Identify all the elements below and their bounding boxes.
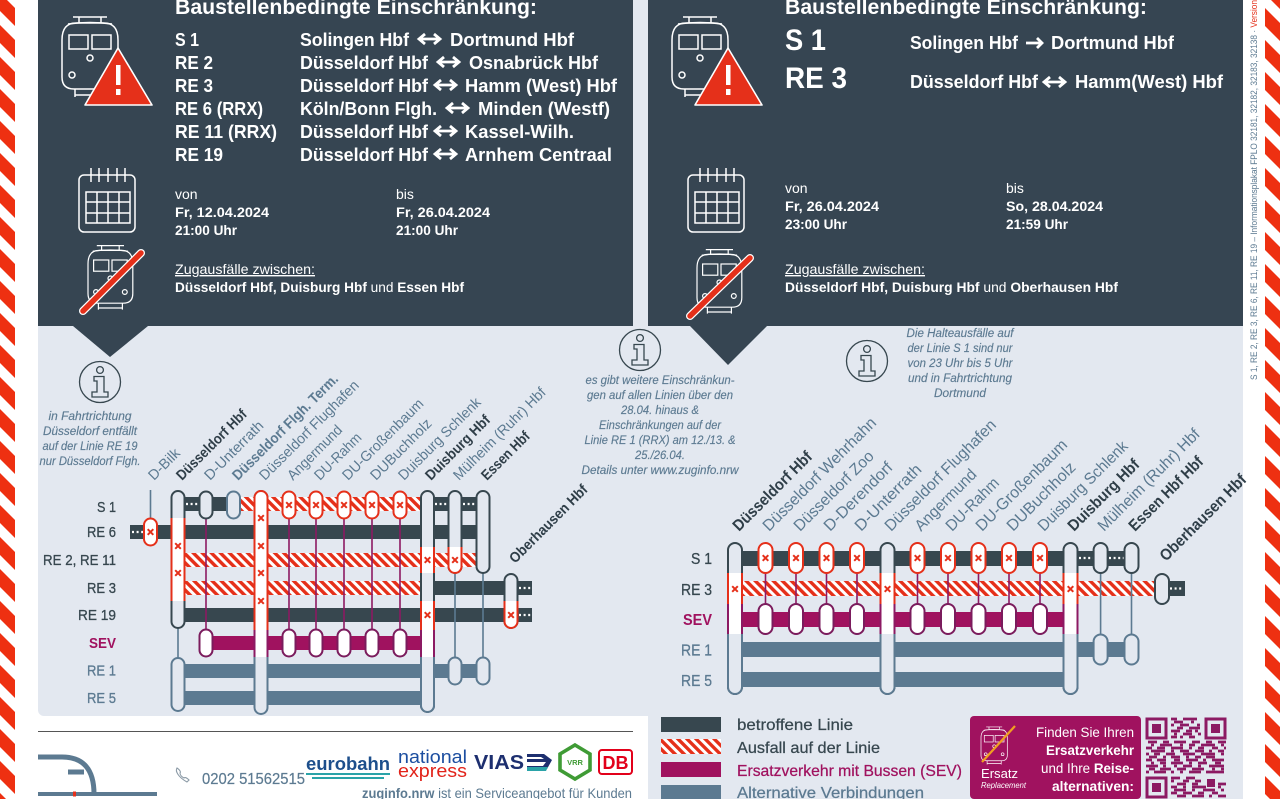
route list: RE 6 (RRX) xyxy=(175,98,263,119)
route list: Düsseldorf Hbf xyxy=(300,121,429,142)
stops xyxy=(144,491,518,714)
row labels: SEV xyxy=(683,612,712,629)
Ersatz label: Replacement xyxy=(981,780,1027,790)
route list: Arnhem Centraal xyxy=(465,144,612,165)
route list: Solingen Hbf xyxy=(300,29,410,50)
note: left xyxy=(40,411,140,468)
note: left: auf der Linie RE 19 xyxy=(42,441,138,453)
icon: info middle xyxy=(620,330,660,370)
station labels: Mülheim (Ruhr) Hbf xyxy=(1095,426,1204,535)
line bars xyxy=(130,497,532,705)
note: middle: 28.04. hinaus & xyxy=(620,405,699,417)
date range: bis xyxy=(1006,180,1024,196)
row labels: RE 2, RE 11 xyxy=(43,552,116,569)
station labels: Düsseldorf Hbf xyxy=(174,407,251,484)
station labels: D-Derendorf xyxy=(821,459,897,535)
route list: Düsseldorf Hbf xyxy=(300,144,429,165)
logo: VRR xyxy=(560,745,590,779)
row labels: S 1 xyxy=(691,551,712,568)
connector lines xyxy=(150,490,483,660)
call to action: und Ihre Reise- xyxy=(1041,760,1134,776)
note: left: in Fahrtrichtung xyxy=(48,411,132,423)
row labels xyxy=(681,551,712,690)
phone number: 0202 51562515 xyxy=(202,771,305,788)
station labels: D-Bilk xyxy=(146,445,184,484)
station labels: Duisburg Schlenk xyxy=(1035,437,1132,535)
routes: Düsseldorf Hbf xyxy=(910,71,1039,92)
station labels: Duisburg Hbf xyxy=(1065,456,1144,535)
logo: DB xyxy=(599,750,632,774)
station labels: Düsseldorf Flughafen xyxy=(257,378,363,484)
route list: Hamm (West) Hbf xyxy=(465,75,618,96)
row labels: RE 1 xyxy=(681,642,712,660)
icon: train warning xyxy=(62,17,152,105)
icon: calendar xyxy=(79,168,135,232)
date range xyxy=(785,180,1103,232)
note: middle: 25./26.04. xyxy=(634,450,685,462)
icon: calendar xyxy=(688,168,744,232)
connector lines xyxy=(766,573,1132,635)
logo: VIAS: VIAS xyxy=(474,752,524,774)
station labels: Düsseldorf Flgh. Term. xyxy=(230,371,342,484)
row labels: RE 3 xyxy=(87,580,116,597)
station labels: Angermund xyxy=(912,466,980,535)
logo: national express: express xyxy=(398,761,467,781)
routes xyxy=(910,32,1224,92)
route list xyxy=(175,29,618,165)
station labels: Essen Hbf Hbf xyxy=(1126,453,1208,535)
route arrows xyxy=(419,34,468,159)
station labels: Angermund xyxy=(285,422,346,484)
date range: So, 28.04.2024 xyxy=(1006,198,1103,214)
route list: Düsseldorf Hbf xyxy=(300,75,429,96)
logo: national express xyxy=(398,747,467,781)
station labels: D-Unterrath xyxy=(202,418,267,484)
route list: RE 2 xyxy=(175,52,213,73)
note: right: Die Halteausfälle auf xyxy=(906,328,1015,340)
date range: Fr, 26.04.2024 xyxy=(396,204,490,220)
date range: 21:59 Uhr xyxy=(1006,216,1069,232)
note: middle: es gibt weitere Einschränkun- xyxy=(586,375,735,387)
icon: train warning xyxy=(672,17,762,105)
logo: VRR: VRR xyxy=(567,758,583,767)
note: middle: Einschränkungen auf der xyxy=(599,420,722,432)
station labels: Oberhausen Hbf xyxy=(507,482,591,567)
note: left: Düsseldorf entfällt xyxy=(43,426,138,438)
logo: zuginfo xyxy=(38,757,157,796)
station labels: Düsseldorf Flughafen xyxy=(882,417,1000,535)
route list: RE 19 xyxy=(175,144,223,165)
line names: S 1 xyxy=(785,24,826,57)
note: middle: Details unter www.zuginfo.nrw xyxy=(582,465,739,477)
Ersatz label: Ersatz xyxy=(981,766,1018,781)
logo: eurobahn: eurobahn xyxy=(306,754,390,774)
row labels: RE 6 xyxy=(87,524,116,541)
legend: replacement buses: Ersatzverkehr mit Bussen (SEV) xyxy=(737,763,962,780)
row labels: RE 5 xyxy=(681,673,712,690)
date range: von xyxy=(175,186,198,202)
note: right: Dortmund xyxy=(934,388,987,400)
row labels: S 1 xyxy=(97,499,116,516)
route list: Köln/Bonn Flgh. xyxy=(300,98,437,119)
station labels: DU-Rahm xyxy=(312,430,365,484)
note: right: von 23 Uhr bis 5 Uhr xyxy=(908,358,1014,370)
line names xyxy=(785,24,847,95)
route list: Minden (Westf) xyxy=(478,98,610,119)
station labels xyxy=(146,371,591,567)
legend: cancellation xyxy=(661,739,880,757)
note: right xyxy=(906,328,1015,400)
train cancellations: Zugausfälle zwischen: xyxy=(785,261,925,277)
row labels: SEV xyxy=(89,635,116,652)
call to action: Finden Sie Ihren xyxy=(1036,724,1134,740)
station labels: Duisburg Hbf xyxy=(423,412,494,484)
station labels: Essen Hbf xyxy=(479,429,534,484)
legend: cancellation: Ausfall auf der Linie xyxy=(737,740,880,757)
note: middle xyxy=(582,375,739,477)
train cancellations xyxy=(175,261,464,295)
line names: RE 3 xyxy=(785,62,847,95)
Ersatz label xyxy=(981,766,1027,790)
line bars xyxy=(735,551,1185,687)
station labels: D-Unterrath xyxy=(852,461,925,535)
station labels: Oberhausen Hbf xyxy=(1157,471,1251,565)
row labels: RE 1 xyxy=(87,662,116,680)
train cancellations: Düsseldorf Hbf, Duisburg Hbf und Essen Hbf xyxy=(175,279,464,295)
logo: VIAS xyxy=(474,752,552,774)
row labels: RE 19 xyxy=(78,607,116,624)
icon: info right xyxy=(846,340,888,382)
legend: alternatives xyxy=(661,785,924,799)
call to action: alternativen: xyxy=(1052,778,1134,794)
date range: 23:00 Uhr xyxy=(785,216,848,232)
date range: bis xyxy=(396,186,414,202)
logo: national express: national xyxy=(398,747,467,767)
station labels: Düsseldorf Zoo xyxy=(791,448,878,535)
note: left: nur Düsseldorf Flgh. xyxy=(40,456,140,468)
row labels: RE 5 xyxy=(87,690,116,707)
routes: Dortmund Hbf xyxy=(1051,32,1175,53)
legend: replacement buses xyxy=(661,762,962,780)
station labels: DU-Großenbaum xyxy=(340,396,427,484)
route arrows xyxy=(1026,38,1065,87)
date range: 21:00 Uhr xyxy=(175,222,238,238)
note: right: und in Fahrtrichtung xyxy=(908,373,1013,385)
legend: affected line: betroffene Linie xyxy=(737,717,853,734)
station labels: DUBuchholz xyxy=(1004,459,1079,535)
station labels: DUBuchholz xyxy=(368,416,435,484)
stops xyxy=(728,543,1169,694)
station labels: Düsseldorf Hbf xyxy=(730,448,817,535)
footer divider xyxy=(38,730,633,732)
call to action: Ersatzverkehr xyxy=(1046,742,1135,758)
icon: info left xyxy=(80,362,120,402)
station labels: DU-Rahm xyxy=(943,475,1003,535)
date range xyxy=(175,186,490,238)
row labels xyxy=(43,499,116,707)
route list: RE 11 (RRX) xyxy=(175,121,277,142)
note: middle: Linie RE 1 (RRX) am 12./13. & xyxy=(584,435,736,447)
route list: S 1 xyxy=(175,29,199,50)
route list: Kassel-Wilh. xyxy=(465,121,574,142)
route list: RE 3 xyxy=(175,75,213,96)
note: right: der Linie S 1 sind nur xyxy=(908,343,1014,355)
train cancellations: Düsseldorf Hbf, Duisburg Hbf und Oberhausen Hbf xyxy=(785,279,1118,295)
logo: DB: DB xyxy=(602,753,628,773)
date range: Fr, 12.04.2024 xyxy=(175,204,269,220)
replacement info box xyxy=(970,716,1141,799)
icon: crossed train xyxy=(690,250,750,316)
date range: Fr, 26.04.2024 xyxy=(785,198,879,214)
panel: left restriction xyxy=(38,0,633,357)
legend xyxy=(661,717,962,799)
QR code xyxy=(1145,717,1227,799)
line diagram: right xyxy=(681,415,1251,694)
icon: phone xyxy=(176,768,189,782)
call to action xyxy=(1036,724,1135,794)
hazard stripes left xyxy=(0,0,15,799)
icon: crossed train xyxy=(83,246,141,311)
legend: affected line xyxy=(661,717,853,734)
routes: Solingen Hbf xyxy=(910,32,1019,53)
route list: Osnabrück Hbf xyxy=(469,52,599,73)
train cancellations xyxy=(785,261,1118,295)
station labels xyxy=(730,415,1251,565)
note: middle: gen auf allen Linien über den xyxy=(587,390,733,402)
panel: right restriction xyxy=(648,0,1243,365)
hazard stripes right xyxy=(1265,0,1280,799)
station labels: Duisburg Schlenk xyxy=(396,394,485,484)
route list: Dortmund Hbf xyxy=(450,29,575,50)
station labels: Mülheim (Ruhr) Hbf xyxy=(451,384,550,484)
routes: Hamm(West) Hbf xyxy=(1075,71,1224,92)
row labels: RE 3 xyxy=(681,582,712,599)
date range: 21:00 Uhr xyxy=(396,222,459,238)
route list: Düsseldorf Hbf xyxy=(300,52,429,73)
icon: crossed train xyxy=(981,726,1015,765)
date range: von xyxy=(785,180,808,196)
line diagram: left xyxy=(43,371,591,714)
station labels: Düsseldorf Wehrhahn xyxy=(760,415,880,535)
train cancellations: Zugausfälle zwischen: xyxy=(175,261,315,277)
station labels: DU-Großenbaum xyxy=(973,437,1071,535)
